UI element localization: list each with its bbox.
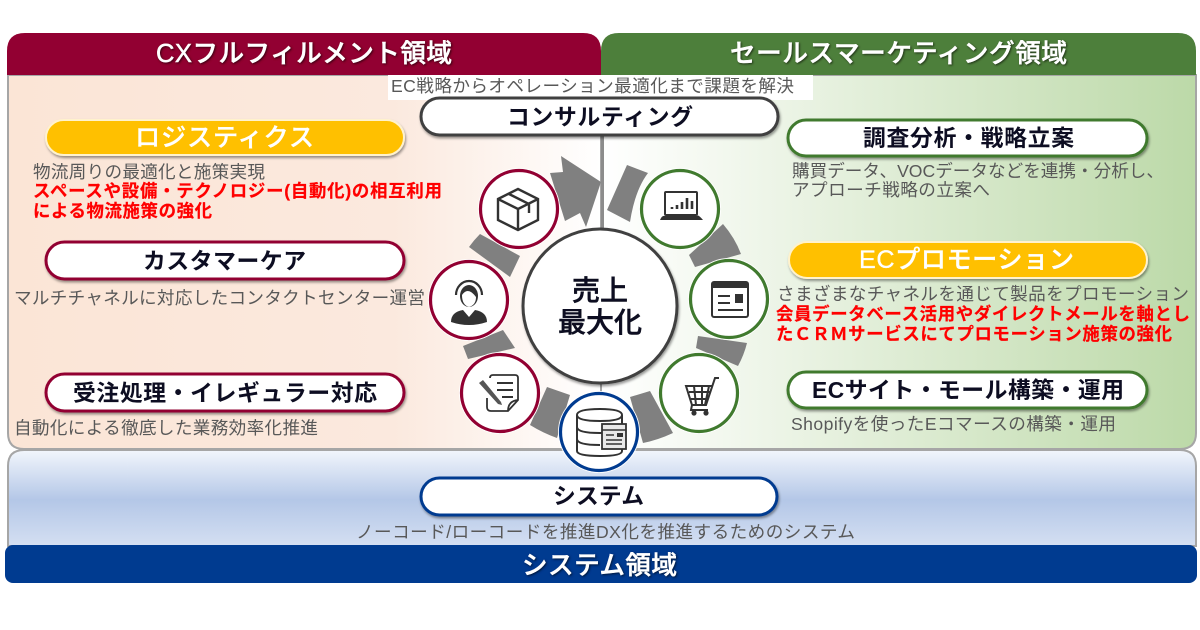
center circle: sales maximization [523,229,677,383]
logistics text: 物流周りの最適化と施策実現 [33,162,265,182]
logistics text: による物流施策の強化 [33,201,212,221]
panel: CX fulfillment body [8,75,601,449]
pill: EC site: ECサイト・モール構築・運用 [812,377,1124,403]
research text: アプローチ戦略の立案へ [792,180,990,200]
EC promotion text: さまざまなチャネルを通じて製品をプロモーション [777,284,1189,304]
heading: CX fulfillment: CXフルフィルメント領域 [156,39,452,68]
research text [792,161,1164,200]
center circle: sales maximization: 売上 [572,275,628,306]
EC promotion text: 会員データベース活用やダイレクトメールを軸とし [776,304,1190,324]
pill: consulting: コンサルティング [507,104,693,130]
EC promotion text: たＣＲＭサービスにてプロモーション施策の強化 [776,324,1172,344]
pill: order processing: 受注処理・イレギュラー対応 [73,380,377,406]
icon: shopping cart [658,352,740,434]
vertical connector [601,135,604,235]
heading: sales marketing: セールスマーケティング領域 [730,39,1067,68]
logistics text [33,162,442,221]
pill: consulting [421,98,778,135]
pill: EC promotion [789,242,1147,278]
system text: ノーコード/ローコードを推進DX化を推進するためのシステム [356,522,855,542]
EC site text: Shopifyを使ったEコマースの構築・運用 [791,414,1116,434]
pill: order processing [46,374,404,411]
icon: order document and pen [459,352,541,434]
panel: sales marketing body [601,75,1196,449]
pill: customer care: カスタマーケア [143,248,306,274]
pill: EC site [788,372,1147,408]
pill: customer care [46,242,404,279]
pill: logistics: ロジスティクス [135,124,314,152]
pill: logistics [46,120,404,155]
EC promotion text [776,284,1190,344]
research text: 購買データ、VOCデータなどを連携・分析し、 [792,161,1164,181]
icon: system database [558,391,640,473]
heading: sales marketing [601,33,1196,75]
icon: call center agent [428,259,510,341]
heading: CX fulfillment [7,33,601,75]
panel: system body [8,450,1196,546]
pill: EC promotion: ECプロモーション [859,246,1074,274]
pill: research and strategy [788,120,1147,156]
order processing text: 自動化による徹底した業務効率化推進 [14,418,318,438]
icon: logistics box [478,168,560,250]
cycle arrows [463,156,747,443]
icon: analytics laptop [639,168,721,250]
logistics text: スペースや設備・テクノロジー(自動化)の相互利用 [33,181,442,201]
heading: system area: システム領域 [522,551,677,580]
pill: research and strategy: 調査分析・戦略立案 [863,125,1074,151]
pill: system [421,478,777,515]
customer care text: マルチチャネルに対応したコンタクトセンター運営 [14,288,425,308]
pill: system: システム [553,483,644,509]
consulting description: EC戦略からオペレーション最適化まで課題を解決 [391,76,794,96]
center circle: sales maximization: 最大化 [558,307,642,338]
icon: browser window [688,258,770,340]
heading: system area [5,545,1197,583]
